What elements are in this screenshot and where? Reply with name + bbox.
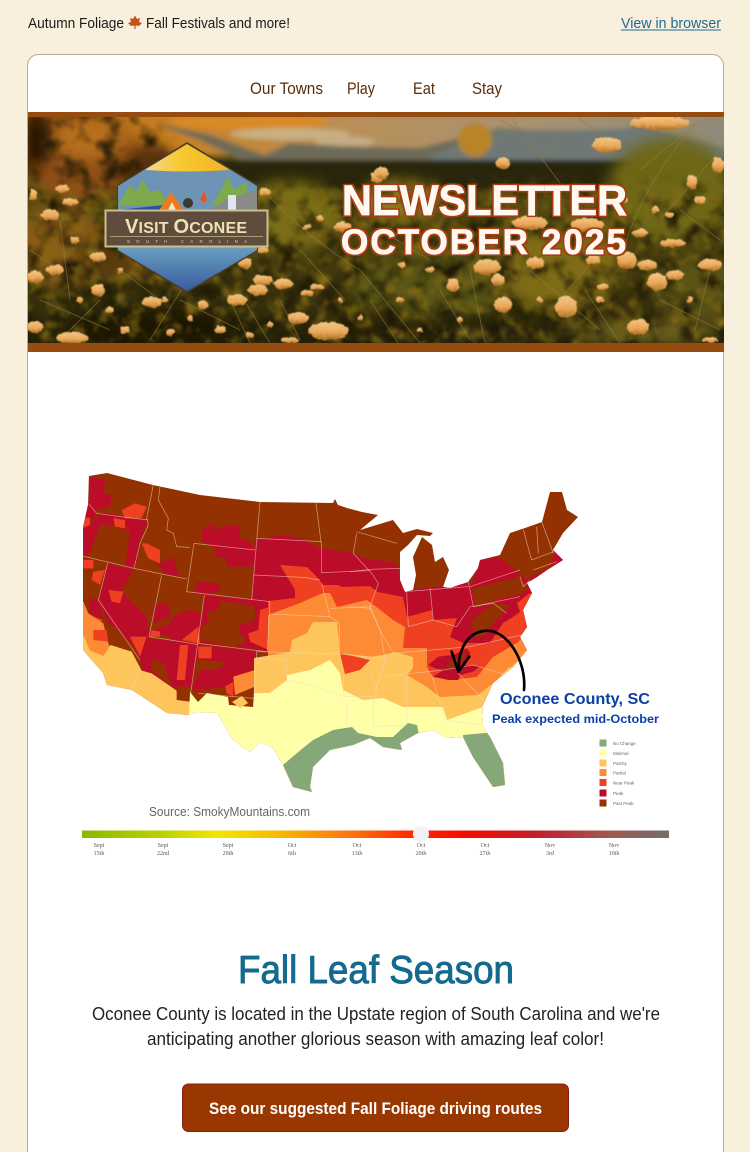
banner headline: NEWSLETTER (342, 177, 627, 225)
map legend (600, 740, 636, 806)
timeline slider: Oct (417, 843, 426, 849)
partial band (268, 593, 535, 800)
timeline slider: 22nd (157, 851, 169, 857)
timeline slider: 13th (352, 851, 362, 857)
navigation menu (250, 80, 503, 98)
timeline slider: Oct (353, 843, 362, 849)
banner borders (28, 112, 724, 352)
timeline slider: 10th (609, 851, 619, 857)
logo: Visit Oconee badge (106, 142, 268, 294)
intro paragraph: anticipating another glorious season with amazing leaf color! (147, 1029, 604, 1049)
timeline slider: 6th (288, 851, 296, 857)
timeline slider: 27th (480, 851, 490, 857)
photo texture (28, 117, 724, 343)
logo: Visit Oconee badge: VISIT OCONEE (125, 216, 247, 238)
timeline slider: 20th (416, 851, 426, 857)
navigation menu: Our Towns (250, 80, 323, 98)
map legend: Minimal (613, 751, 629, 756)
view in browser link: View in browser (621, 15, 721, 32)
banner (28, 112, 724, 352)
eastern overlays (428, 576, 528, 680)
timeline slider: 15th (94, 851, 104, 857)
map legend: Patchy (613, 761, 628, 766)
timeline slider: 3rd (546, 851, 554, 857)
banner headline (341, 177, 627, 262)
timeline slider: Oct (288, 843, 297, 849)
timeline slider: Sept (158, 843, 169, 849)
map legend: Past Peak (613, 801, 634, 806)
timeline slider: Nov (545, 843, 555, 849)
preheader text (28, 15, 290, 32)
patchy band (254, 622, 540, 800)
callout: Oconee County peak: Oconee County, SC (500, 691, 650, 708)
western region colour patches (80, 477, 270, 727)
heading: Fall Leaf Season (238, 949, 514, 992)
timeline slider: Oct (481, 843, 490, 849)
timeline slider (82, 826, 669, 857)
map source: Source: SmokyMountains.com (149, 805, 310, 819)
timeline slider: Nov (609, 843, 619, 849)
intro paragraph (92, 1004, 660, 1049)
navigation menu: Play (347, 80, 376, 98)
callout: Oconee County peak (492, 691, 660, 726)
callout: Oconee County peak: Peak expected mid-October (492, 714, 660, 726)
logo: Visit Oconee badge: SOUTH CAROLINA (127, 239, 247, 244)
timeline slider: Sept (94, 843, 105, 849)
banner photo: autumn wildflower field (28, 117, 724, 343)
map legend: Peak (613, 791, 624, 796)
navigation menu: Eat (413, 80, 435, 98)
button: driving routes: See our suggested Fall Foliage driving routes (209, 1099, 542, 1118)
intro paragraph: Oconee County is located in the Upstate region of South Carolina and we're (92, 1004, 660, 1024)
flowers (26, 116, 724, 344)
map legend: Partial (613, 770, 626, 776)
preheader text: Autumn Foliage (28, 15, 124, 32)
preheader text: Fall Festivals and more! (146, 15, 290, 32)
map legend: Near Peak (613, 780, 635, 786)
navigation menu: Stay (472, 80, 503, 98)
map legend: No Change (613, 741, 636, 746)
state borders (83, 485, 557, 727)
banner headline: OCTOBER 2025 (341, 223, 626, 262)
minimal band (189, 660, 520, 800)
no change band (283, 723, 418, 792)
peak band (252, 535, 580, 800)
near peak band (268, 565, 540, 800)
arrow pointing to Oconee County (452, 631, 524, 690)
timeline slider: 29th (223, 851, 233, 857)
button: driving routes (182, 1084, 568, 1132)
fall foliage map of the United States (83, 473, 578, 792)
stems (30, 117, 720, 343)
timeline slider: Sept (223, 843, 234, 849)
Oklahoma near peak patch (340, 653, 370, 674)
